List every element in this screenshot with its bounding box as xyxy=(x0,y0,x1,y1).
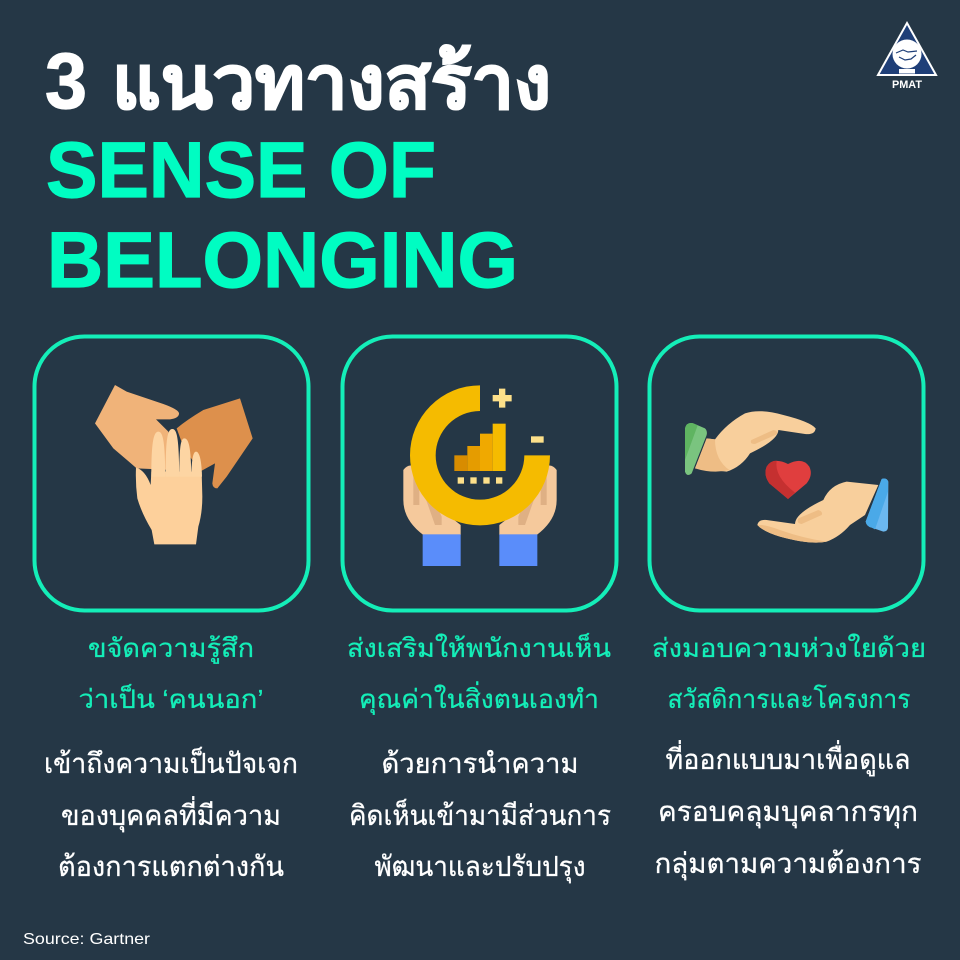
icon: three joined hands xyxy=(95,385,253,544)
heading: column 1: ว่าเป็น ‘คนนอก’ xyxy=(78,683,264,714)
title: แนวทางสร้าง xyxy=(112,41,551,124)
text block: column 3: กลุ่มตามความต้องการ xyxy=(654,848,922,881)
text block: column 1 xyxy=(44,746,298,882)
logo: PMAT xyxy=(878,23,936,91)
panel: welfare care xyxy=(650,336,924,610)
heading: column 2: ส่งเสริมให้พนักงานเห็น xyxy=(347,632,611,663)
text block: column 3 xyxy=(654,740,922,881)
icon: hands holding growth chart xyxy=(403,385,557,566)
title xyxy=(45,36,551,304)
logo: PMAT: PMAT xyxy=(892,79,922,91)
title: SENSE OF xyxy=(46,125,436,214)
heading: column 3 xyxy=(652,633,926,714)
heading: column 2: คุณค่าในสิ่งตนเองทำ xyxy=(359,681,599,715)
text block: column 2: ด้วยการนำความ xyxy=(382,748,578,779)
source: Source: Gartner xyxy=(23,931,151,948)
text block: column 1: ต้องการแตกต่างกัน xyxy=(58,851,284,882)
text block: column 3: ที่ออกแบบมาเพื่อดูแล xyxy=(666,740,910,777)
title: 3 xyxy=(45,36,87,125)
heading: column 1: ขจัดความรู้สึก xyxy=(88,633,254,664)
text block: column 1: ของบุคคลที่มีความ xyxy=(61,796,281,833)
icon: hands with heart xyxy=(685,411,888,543)
text block: column 2 xyxy=(349,748,611,884)
text block: column 3: ครอบคลุมบุคลากรทุก xyxy=(658,796,918,829)
panel: eliminate outsider feeling xyxy=(34,336,308,610)
heading: column 3: สวัสดิการและโครงการ xyxy=(668,684,911,714)
text block: column 2: คิดเห็นเข้ามามีส่วนการ xyxy=(349,798,611,831)
heading: column 3: ส่งมอบความห่วงใยด้วย xyxy=(652,633,926,663)
text block: column 1: เข้าถึงความเป็นปัจเจก xyxy=(44,746,298,779)
heading: column 2 xyxy=(347,632,611,715)
title: BELONGING xyxy=(47,215,518,304)
panel: promote employee value xyxy=(342,336,616,610)
heading: column 1 xyxy=(78,633,264,714)
text block: column 2: พัฒนาและปรับปรุง xyxy=(374,851,586,884)
